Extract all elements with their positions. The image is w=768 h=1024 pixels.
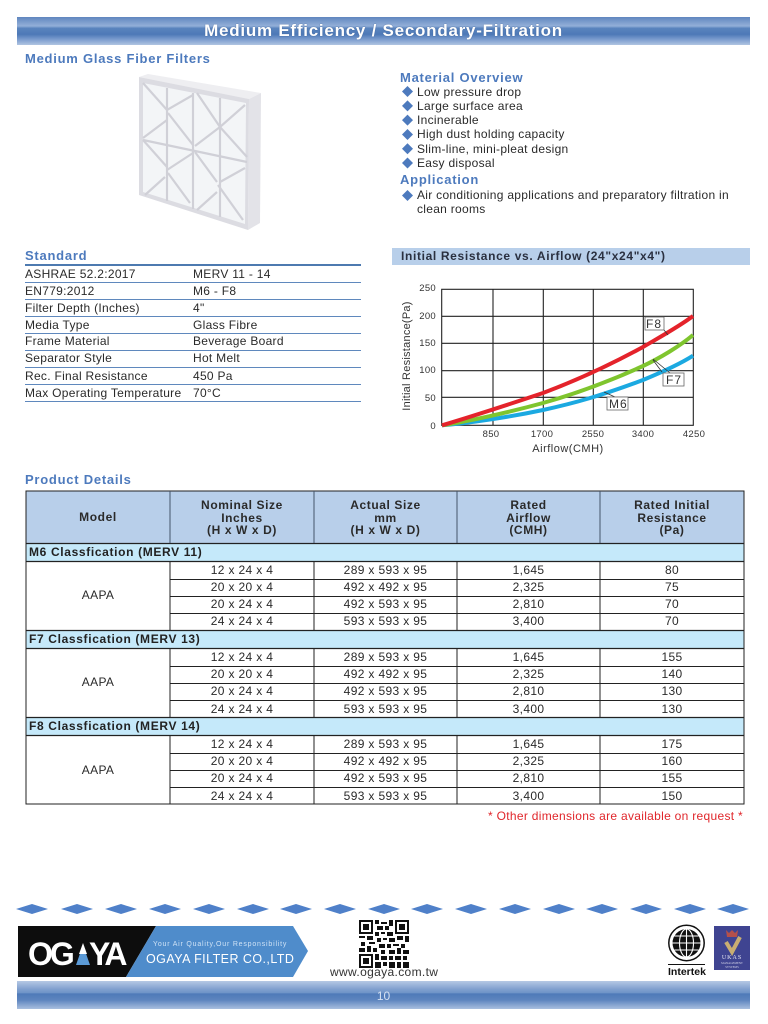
- heading: product details: Product Details: [25, 472, 132, 487]
- list: material features: Slim-line, mini-pleat design: [417, 142, 569, 156]
- table: product details: Rated: [510, 498, 547, 512]
- heading: material overview: Material Overview: [400, 70, 523, 85]
- table: product details: Airflow: [506, 510, 551, 524]
- curve: F8: [442, 316, 693, 425]
- table: product details: 492 x 593 x 95: [344, 597, 427, 611]
- table: product details: Resistance: [637, 510, 707, 524]
- list: material features: Large surface area: [417, 99, 523, 113]
- curve labels: F7: [666, 373, 682, 387]
- table: product details: 593 x 593 x 95: [344, 614, 427, 628]
- table: product details: 492 x 492 x 95: [344, 754, 427, 768]
- table: product details: 2,810: [513, 684, 544, 698]
- table: product details: 1,645: [513, 737, 544, 751]
- table: standard specifications: M6 - F8: [193, 284, 236, 298]
- logo banner: OGAYA: Your Air Quality,Our Responsibility: [153, 941, 287, 948]
- table: product details: 3,400: [513, 789, 544, 803]
- curve labels: [604, 317, 684, 411]
- table: standard specifications: Separator Style: [25, 351, 112, 365]
- line chart: initial resistance vs airflow: Initial Resistance(Pa): [401, 301, 413, 411]
- table: product details: 24 x 24 x 4: [211, 789, 273, 803]
- table: product details: 2,810: [513, 771, 544, 785]
- table: product details: 75: [665, 580, 679, 594]
- table: product details: 492 x 593 x 95: [344, 771, 427, 785]
- table: product details: 289 x 593 x 95: [344, 650, 427, 664]
- logo banner: OGAYA: [18, 926, 308, 977]
- M6 band: [26, 544, 744, 561]
- table: standard specifications: ASHRAE 52.2:2017: [25, 267, 136, 281]
- axis labels: 50: [425, 393, 436, 404]
- table: product details: 20 x 20 x 4: [211, 754, 273, 768]
- logo: UKAS: [714, 926, 750, 970]
- logo: UKAS: MANAGEMENT: [721, 961, 743, 965]
- table: product details: 492 x 492 x 95: [344, 667, 427, 681]
- logo banner: OGAYA: YA: [89, 936, 125, 972]
- image: filter panel: [139, 74, 261, 230]
- axis labels: 200: [419, 311, 436, 322]
- table: standard specifications: Glass Fibre: [193, 318, 258, 332]
- table: product details: 3,400: [513, 702, 544, 716]
- table: product details: F7 Classfication (MERV 13): [29, 632, 200, 646]
- title banner: Medium Efficiency / Secondary-Filtration: [204, 21, 563, 40]
- logo: Intertek: Intertek: [668, 966, 706, 978]
- line chart: initial resistance vs airflow: 1700: [531, 429, 553, 440]
- table: product details: Rated Initial: [634, 498, 710, 512]
- table: product details: 150: [661, 789, 683, 803]
- table: standard specifications: Filter Depth (Inches): [25, 301, 140, 315]
- line chart: initial resistance vs airflow: 850: [483, 429, 499, 440]
- table: product details: 130: [661, 684, 683, 698]
- logo: UKAS: SYSTEMS: [725, 964, 739, 968]
- table: standard specifications: [25, 264, 361, 402]
- table: product details: mm: [374, 510, 397, 524]
- table: product details: 70: [665, 614, 679, 628]
- table: product details: 12 x 24 x 4: [211, 737, 273, 751]
- table: standard specifications: Hot Melt: [193, 351, 240, 365]
- list: material features: Easy disposal: [417, 156, 495, 170]
- curve labels: M6: [609, 397, 628, 411]
- table: product details: 289 x 593 x 95: [344, 563, 427, 577]
- table: product details: 20 x 24 x 4: [211, 597, 273, 611]
- table: product details: Inches: [221, 510, 263, 524]
- table: product details: Model: [79, 510, 117, 524]
- heading: standard: Standard: [25, 248, 87, 263]
- F8 band: [26, 718, 744, 735]
- table: product details: 20 x 20 x 4: [211, 667, 273, 681]
- table: standard specifications: MERV 11 - 14: [193, 267, 271, 281]
- table: product details: 289 x 593 x 95: [344, 737, 427, 751]
- line chart: initial resistance vs airflow: [401, 283, 705, 455]
- line chart: initial resistance vs airflow: 4250: [683, 429, 705, 440]
- logo: UKAS: UKAS: [722, 955, 742, 961]
- table: product details: (Pa): [659, 523, 685, 537]
- table: standard specifications: Beverage Board: [193, 334, 284, 348]
- diamond row: [16, 904, 749, 914]
- axis labels: 250: [419, 283, 436, 294]
- table: product details: (CMH): [509, 523, 548, 537]
- table: product details: Nominal Size: [201, 498, 283, 512]
- table: standard specifications: Frame Material: [25, 334, 110, 348]
- logo: Intertek: [668, 924, 706, 978]
- table: product details: 155: [661, 650, 683, 664]
- axis labels: [419, 283, 436, 432]
- F8 rows: AAPA: [82, 763, 114, 777]
- text: application: Air conditioning applications and preparatory filtration in: [417, 188, 729, 202]
- chart heading: Initial Resistance vs. Airflow (24"x24"x4"): [401, 249, 666, 263]
- logo banner: OGAYA: OG: [28, 936, 72, 972]
- line chart: initial resistance vs airflow: 2550: [582, 429, 604, 440]
- curve labels: F8: [646, 317, 662, 331]
- table header row: [26, 491, 744, 543]
- table: standard specifications: Max Operating Temperature: [25, 386, 181, 400]
- M6 rows: AAPA: [82, 588, 114, 602]
- table: product details: 2,325: [513, 754, 544, 768]
- axis labels: 100: [419, 365, 436, 376]
- table: standard specifications: 4": [193, 301, 205, 315]
- table: product details: 1,645: [513, 563, 544, 577]
- table: product details: 2,325: [513, 580, 544, 594]
- table: product details: 175: [661, 737, 683, 751]
- table: product details: 155: [661, 771, 683, 785]
- footer bar with page number: [17, 981, 750, 1009]
- axis labels: 150: [419, 338, 436, 349]
- table: product details: (H x W x D): [351, 523, 420, 537]
- table: standard specifications: Media Type: [25, 318, 90, 332]
- list: material features: Incinerable: [417, 113, 479, 127]
- logo banner: OGAYA: OGAYA FILTER CO.,LTD: [146, 952, 294, 966]
- table: product details: 1,645: [513, 650, 544, 664]
- table: product details: M6 Classfication (MERV 11): [29, 545, 202, 559]
- heading: product name: Medium Glass Fiber Filters: [25, 51, 211, 66]
- footer bar with page number: 10: [377, 989, 390, 1003]
- table: product details: 80: [665, 563, 679, 577]
- list: material features: [402, 85, 569, 170]
- website: www.ogaya.com.tw: [330, 965, 438, 979]
- table: product details: (H x W x D): [207, 523, 277, 537]
- table: product details: 20 x 24 x 4: [211, 771, 273, 785]
- table: product details: 12 x 24 x 4: [211, 650, 273, 664]
- table: standard specifications: Rec. Final Resistance: [25, 369, 148, 383]
- table: product details: 12 x 24 x 4: [211, 563, 273, 577]
- table: product details: [26, 490, 744, 804]
- table: product details: 160: [661, 754, 683, 768]
- table: product details: 2,810: [513, 597, 544, 611]
- table: product details: 140: [661, 667, 683, 681]
- list: material features: High dust holding capacity: [417, 127, 565, 141]
- table: product details: 492 x 593 x 95: [344, 684, 427, 698]
- QR code: [359, 920, 409, 968]
- axis labels: 0: [430, 421, 436, 432]
- table: product details: 2,325: [513, 667, 544, 681]
- table: product details: 20 x 20 x 4: [211, 580, 273, 594]
- table: product details: 20 x 24 x 4: [211, 684, 273, 698]
- footnote: * Other dimensions are available on request *: [488, 809, 743, 823]
- chart heading: [392, 248, 750, 265]
- table: standard specifications: EN779:2012: [25, 284, 95, 298]
- table: product details: 24 x 24 x 4: [211, 614, 273, 628]
- table: product details: 3,400: [513, 614, 544, 628]
- curve: M6: [442, 356, 693, 425]
- table: product details: 593 x 593 x 95: [344, 789, 427, 803]
- line chart: initial resistance vs airflow: Airflow(CMH): [532, 443, 604, 455]
- table: product details: 130: [661, 702, 683, 716]
- title banner: [17, 17, 750, 45]
- heading: application: Application: [400, 172, 479, 187]
- table: product details: 24 x 24 x 4: [211, 702, 273, 716]
- table: standard specifications: 70°C: [193, 386, 221, 400]
- text: application: clean rooms: [417, 202, 486, 216]
- curve: F7: [442, 335, 693, 425]
- F7 band: [26, 631, 744, 648]
- table: product details: F8 Classfication (MERV 14): [29, 719, 200, 733]
- text: application: [402, 188, 729, 216]
- line chart: initial resistance vs airflow: 3400: [632, 429, 654, 440]
- table: product details: Actual Size: [350, 498, 421, 512]
- table: standard specifications: 450 Pa: [193, 369, 233, 383]
- F7 rows: AAPA: [82, 675, 114, 689]
- list: material features: Low pressure drop: [417, 85, 521, 99]
- table: product details: 70: [665, 597, 679, 611]
- table: product details: 593 x 593 x 95: [344, 702, 427, 716]
- table: product details: 492 x 492 x 95: [344, 580, 427, 594]
